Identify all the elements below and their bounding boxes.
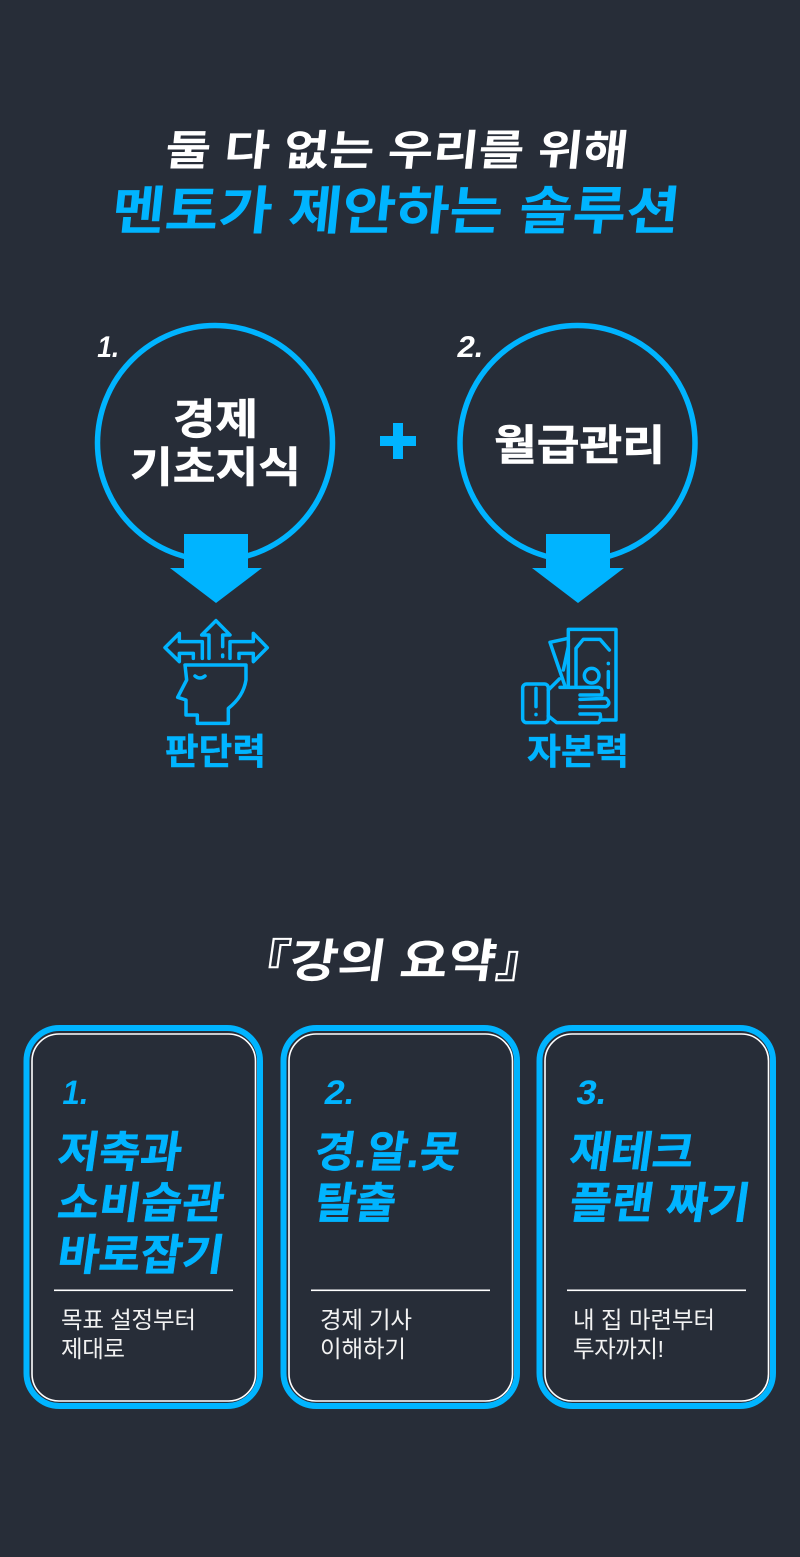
card 3 title: 플랜 짜기 [567, 1180, 753, 1228]
circle 1 [98, 326, 332, 560]
card 1 [26, 1028, 260, 1406]
circle text 1: 경제 [173, 396, 258, 443]
circle text 2: 월급관리 [494, 422, 665, 469]
card 2 number: 2. [322, 1074, 358, 1112]
card 3 body: 투자까지! [573, 1336, 664, 1362]
card 3 title [567, 1129, 753, 1228]
title line 2: 멘토가 제안하는 솔루션 [109, 183, 683, 241]
title [109, 127, 683, 241]
card 1 body: 목표 설정부터 [61, 1307, 196, 1333]
panel: economic knowledge [95, 326, 332, 772]
card 2 title: 경.알.못 [312, 1129, 463, 1177]
card 1 title: 소비습관 [55, 1180, 227, 1228]
circle 2 [460, 326, 695, 560]
card 3 title: 재테크 [567, 1129, 697, 1177]
title line 1: 둘 다 없는 우리를 위해 [163, 127, 631, 174]
arrow 2 [532, 534, 624, 603]
card 3 number: 3. [574, 1074, 610, 1112]
circle text 1: 기초지식 [130, 444, 301, 491]
card 1 title [55, 1129, 227, 1280]
card 2 title [312, 1129, 463, 1228]
card 2 body: 경제 기사 [320, 1307, 412, 1333]
card 1 title: 저축과 [55, 1129, 185, 1177]
card 3 body: 내 집 마련부터 [573, 1307, 715, 1333]
summary heading: 『강의 요약』 [235, 935, 552, 987]
card 2 title: 탈출 [312, 1180, 399, 1228]
card 1 title: 바로잡기 [55, 1232, 227, 1280]
card 1 body: 제대로 [61, 1336, 125, 1362]
panel: salary management [455, 326, 695, 772]
plus sign [380, 423, 416, 459]
label: capital: 자본력 [527, 731, 629, 772]
card 1 number: 1. [60, 1074, 92, 1112]
card 2 body: 이해하기 [320, 1336, 406, 1362]
icon: head with arrows [165, 621, 267, 723]
icon: hand with money [523, 629, 616, 723]
label: judgment: 판단력 [165, 731, 266, 772]
arrow 1 [170, 534, 262, 603]
card 3 [540, 1028, 773, 1406]
number 2: 2. [455, 331, 487, 364]
card 2 [284, 1028, 517, 1406]
number 1: 1. [95, 331, 123, 364]
